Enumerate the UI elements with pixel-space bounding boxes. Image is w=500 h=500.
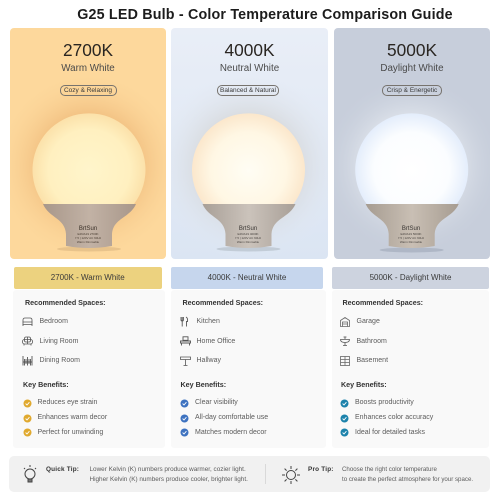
label strip: warm: 2700K - Warm White xyxy=(51,273,125,282)
icon: basement xyxy=(340,356,350,366)
card background: warm xyxy=(13,290,165,448)
icon: check xyxy=(24,428,32,436)
text: kitchen: Kitchen xyxy=(196,318,220,325)
icon: daylight bulb: BrtSun xyxy=(402,226,420,232)
text: bathroom: Bathroom xyxy=(356,338,387,344)
title: G25 LED Bulb - Color Temperature Comparison Guide xyxy=(77,7,453,23)
icon: desk xyxy=(180,336,191,346)
tag: Cozy & Relaxing xyxy=(64,86,112,94)
text: hallway: Hallway xyxy=(196,357,221,364)
name: Daylight White xyxy=(380,63,444,74)
icon: daylight bulb: 7.5 | 120V AC 60Hz xyxy=(398,236,425,240)
icon: neutral bulb xyxy=(182,98,315,252)
icon: sun xyxy=(282,466,300,484)
divider xyxy=(265,464,266,484)
icon: daylight bulb: E26/A19 5000K xyxy=(400,232,422,236)
icon: warm bulb xyxy=(20,96,158,252)
icon: neutral bulb: Warm Dimmable xyxy=(237,240,259,244)
icon: daylight bulb: Warm Dimmable xyxy=(400,240,422,244)
text: garage: Garage xyxy=(356,318,380,325)
icon: check xyxy=(180,428,188,436)
label strip: warm xyxy=(14,267,162,289)
icon: check xyxy=(24,400,32,408)
text: benefit: Enhances warm decor xyxy=(38,414,107,421)
heading: daylight spaces: Recommended Spaces: xyxy=(342,299,423,307)
tips bar xyxy=(9,456,490,492)
icon: sofa xyxy=(22,336,33,346)
heading: daylight benefits: Key Benefits: xyxy=(341,380,387,388)
tag xyxy=(382,84,442,96)
heading: neutral spaces: Recommended Spaces: xyxy=(182,299,263,307)
text: living room: Living Room xyxy=(40,338,78,344)
text: benefit: Reduces eye strain xyxy=(38,399,97,406)
text: benefit: Clear visibility xyxy=(195,399,238,406)
text: home office: Home Office xyxy=(196,338,235,344)
heading: warm benefits: Key Benefits: xyxy=(23,380,69,388)
icon: check xyxy=(340,400,348,408)
text: benefit: All-day comfortable use xyxy=(195,414,268,421)
icon: neutral bulb: 7.5 | 120V AC 60Hz xyxy=(235,236,262,240)
icon: check xyxy=(340,414,348,422)
tag: Crisp & Energetic xyxy=(387,86,437,94)
tag xyxy=(217,84,279,96)
icon: warm bulb: Warm Dimmable xyxy=(77,240,99,244)
text: benefit: Enhances color accuracy xyxy=(355,414,433,421)
quick tip text xyxy=(90,466,248,483)
text: benefit: Ideal for detailed tasks xyxy=(355,428,425,436)
tag: Balanced & Natural xyxy=(220,86,276,94)
icon: warm bulb: 7.5 | 120V AC 60Hz xyxy=(75,236,102,240)
heading: warm spaces: Recommended Spaces: xyxy=(25,299,106,307)
icon: bed xyxy=(22,318,32,326)
temperature: 4000K xyxy=(224,40,274,60)
icon: signpost xyxy=(180,356,191,366)
name: Neutral White xyxy=(220,63,279,74)
icon: light bulb xyxy=(24,465,36,482)
icon: daylight bulb xyxy=(348,102,476,252)
panel: 2700K warm white xyxy=(10,28,166,259)
text: benefit: Boosts productivity xyxy=(355,399,414,406)
icon: warm bulb: BrtSun xyxy=(79,226,97,232)
card background: neutral xyxy=(171,290,326,448)
quick tip label: Quick Tip: xyxy=(46,466,79,473)
icon: check xyxy=(24,414,32,422)
temperature: 5000K xyxy=(387,40,437,60)
label strip: daylight: 5000K - Daylight White xyxy=(370,273,451,282)
icon: check xyxy=(340,428,348,436)
icon: warm bulb: E26/A19 2700K xyxy=(77,232,99,236)
label strip: neutral xyxy=(171,267,323,289)
pro tip text xyxy=(342,466,473,483)
card background: daylight xyxy=(332,290,489,448)
tag xyxy=(60,84,116,96)
icon: sink xyxy=(340,336,350,346)
label strip: neutral: 4000K - Neutral White xyxy=(208,273,286,282)
icon: check xyxy=(180,400,188,408)
text: bedroom: Bedroom xyxy=(40,318,68,325)
text: benefit: Perfect for unwinding xyxy=(38,428,103,436)
pro tip text: to create the perfect atmosphere for your space. xyxy=(342,476,473,483)
icon: utensils xyxy=(180,316,188,326)
heading: neutral benefits: Key Benefits: xyxy=(180,380,226,388)
name: Warm White xyxy=(61,63,115,74)
icon: neutral bulb: BrtSun xyxy=(239,226,257,232)
text: dining room: Dining Room xyxy=(40,357,80,364)
panel: 5000K daylight white xyxy=(334,28,490,259)
icon: neutral bulb: E26/A19 4000K xyxy=(237,232,259,236)
panel: 4000K neutral white xyxy=(171,28,328,259)
quick tip text: Higher Kelvin (K) numbers produce cooler, brighter light. xyxy=(90,476,248,483)
icon: check xyxy=(180,414,188,422)
text: basement: Basement xyxy=(356,357,388,364)
label strip: daylight xyxy=(332,267,489,289)
text: benefit: Matches modern decor xyxy=(195,428,267,436)
pro tip label: Pro Tip: xyxy=(308,466,334,473)
icon: dining xyxy=(22,356,32,366)
icon: garage xyxy=(340,317,350,327)
temperature: 2700K xyxy=(63,40,113,60)
quick tip text: Lower Kelvin (K) numbers produce warmer, cozier light. xyxy=(90,466,246,473)
pro tip text: Choose the right color temperature xyxy=(342,466,437,473)
